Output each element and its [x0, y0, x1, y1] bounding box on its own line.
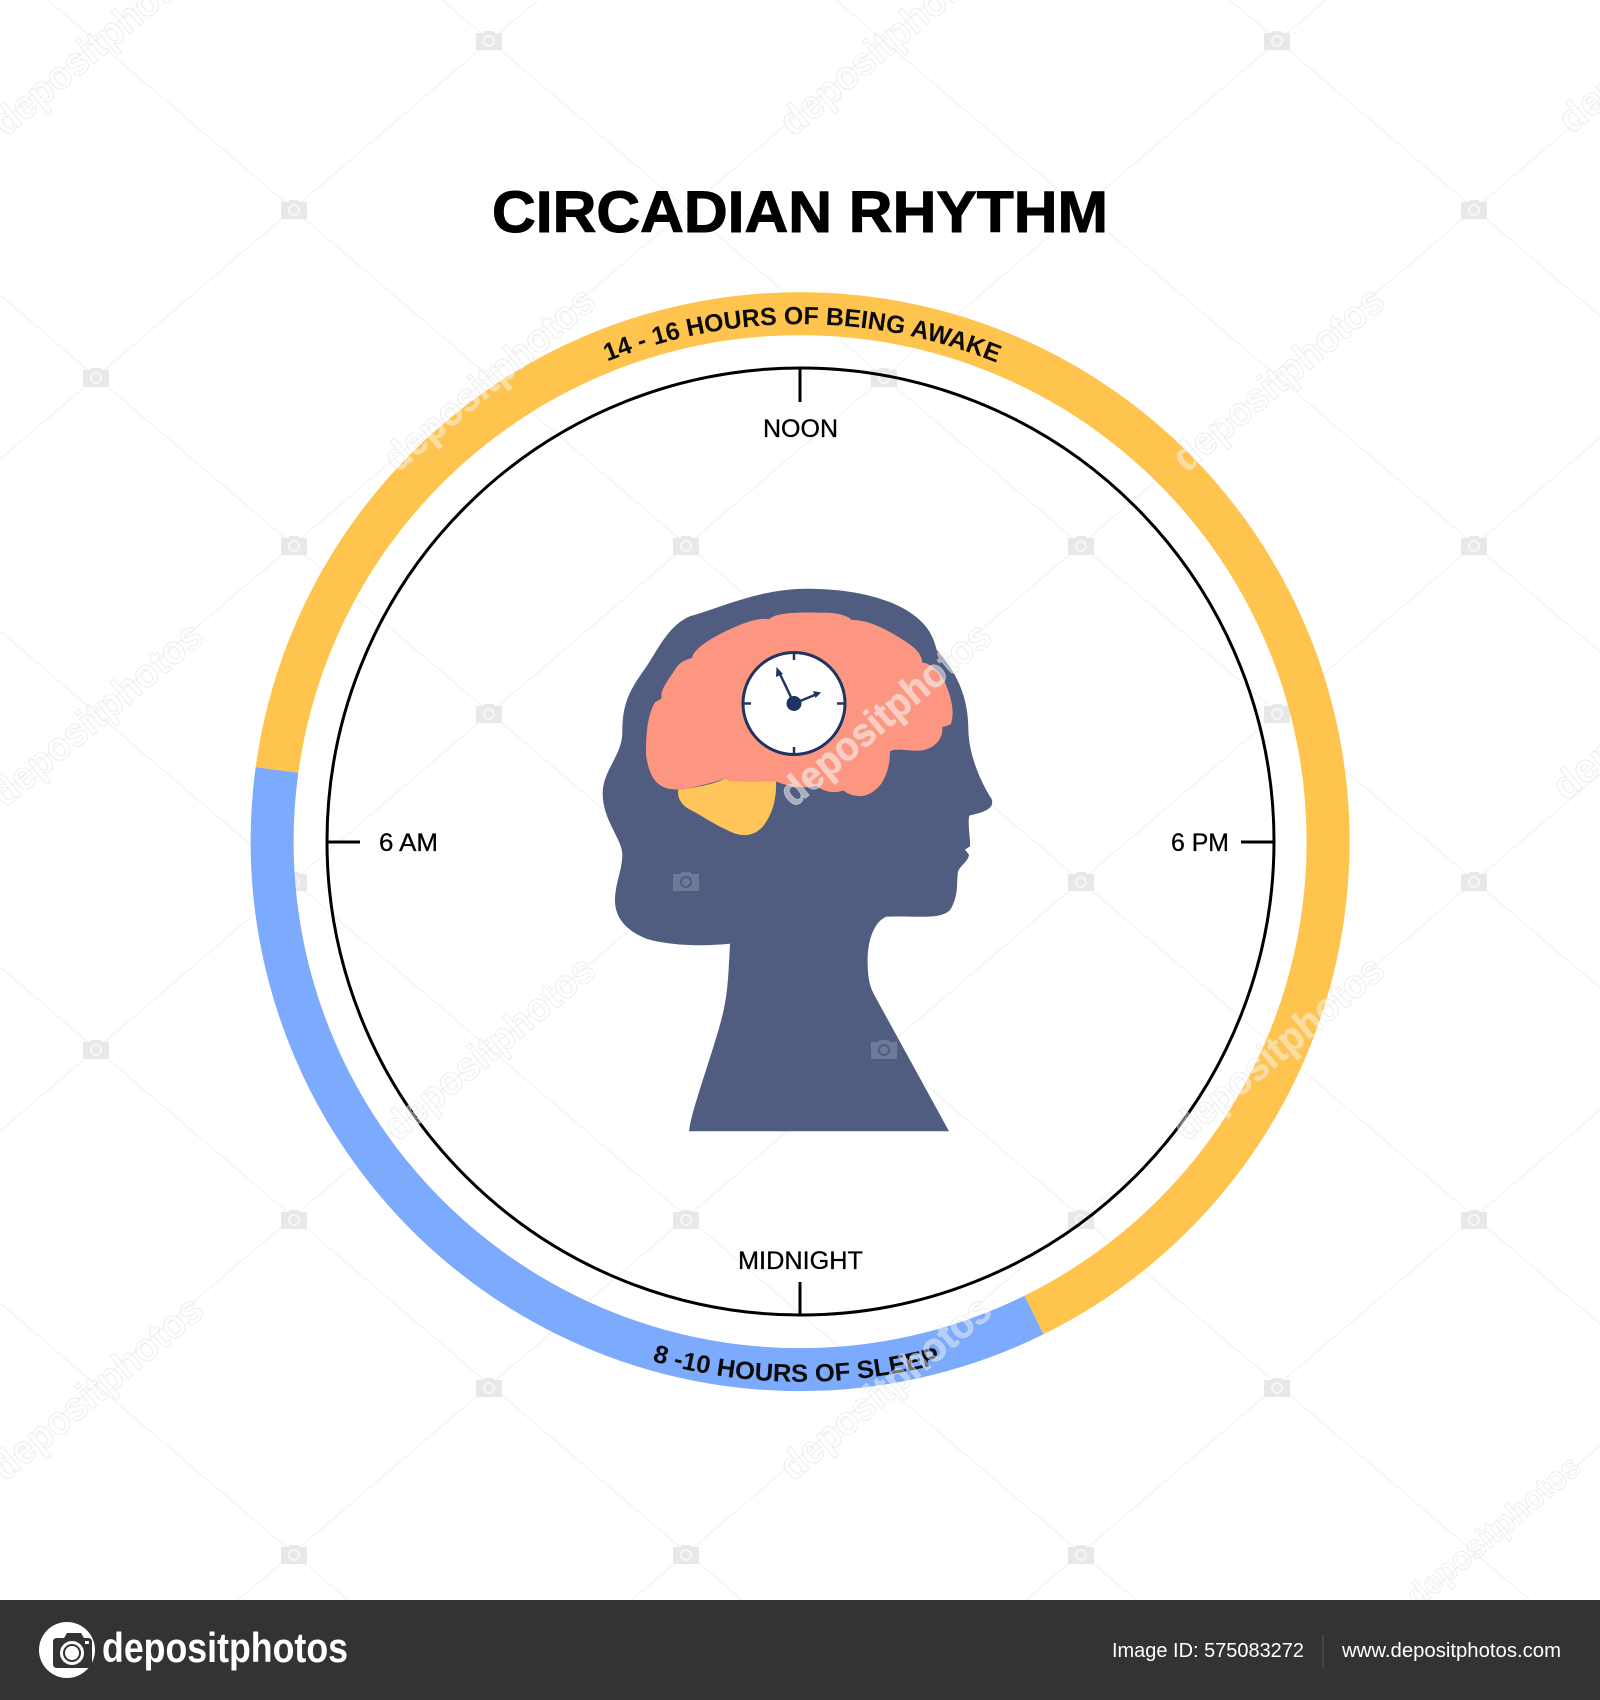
cameras over head	[673, 872, 897, 1059]
curved label: hours of sleep: 8 -10 HOURS OF SLEEP	[654, 1346, 937, 1382]
footer wordmark: depositphotos	[102, 1624, 348, 1671]
footer website: www.depositphotos.com	[1341, 1640, 1561, 1662]
cerebellum	[678, 778, 776, 835]
outer ring: being awake arc	[277, 314, 1328, 1315]
depositphotos watermarks: depositphotos	[1164, 278, 1393, 480]
curved label: hours awake: 14 - 16 HOURS OF BEING AWAKE	[604, 306, 1002, 362]
title: CIRCADIAN RHYTHM	[492, 180, 1108, 245]
label: noon: NOON	[763, 415, 838, 443]
depositphotos watermarks: depositphotos	[771, 1287, 1000, 1489]
label: midnight: MIDNIGHT	[738, 1247, 863, 1275]
dial tick marks	[327, 368, 1274, 1315]
clock dial circle	[327, 368, 1274, 1315]
head silhouette	[603, 589, 992, 1131]
brain cerebrum	[646, 612, 953, 796]
footer logo icon	[39, 1622, 95, 1678]
clock icon in brain	[743, 652, 845, 754]
depositphotos watermarks: depositphotos	[375, 278, 604, 480]
depositphotos watermarks: depositphotos	[375, 947, 604, 1149]
outer ring: sleep arc	[272, 770, 1034, 1370]
depositphotos watermarks: depositphotos	[1164, 947, 1393, 1149]
depositphotos watermarks: depositphotos	[1398, 1447, 1588, 1614]
head illustration	[603, 589, 992, 1131]
depositphotos watermarks: depositphotos	[771, 613, 1000, 815]
footer image id: Image ID: 575083272	[1112, 1640, 1304, 1662]
footer bar	[0, 1600, 1600, 1700]
label: 6 pm: 6 PM	[1171, 829, 1229, 857]
label: 6 am: 6 AM	[379, 829, 438, 857]
